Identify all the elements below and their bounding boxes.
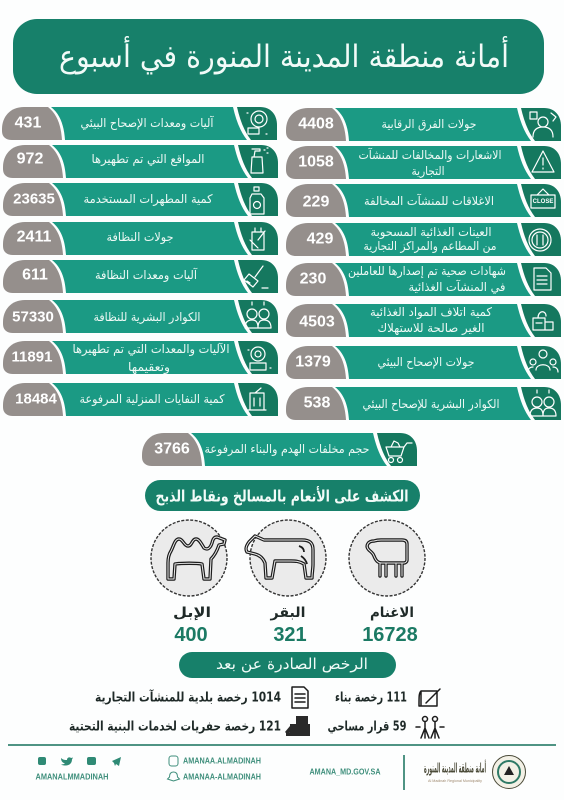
stat: household waste 18484: 18484 <box>15 390 58 408</box>
licence: survey decision <box>328 716 444 738</box>
stat: demolition waste 3766: 3766 <box>154 440 190 458</box>
stat: environmental rounds 1379 <box>286 346 561 379</box>
stat: household waste 18484: كمية النفايات المنزلية المرفوعة <box>80 392 225 407</box>
stat: closures 229: 229 <box>303 194 329 210</box>
icon: sheep <box>349 520 425 596</box>
stat: inspection rounds 4408: 4408 <box>298 116 334 132</box>
footer: logo wordmark: Al Madinah Regional Municipality <box>428 779 482 783</box>
stat: destroyed food 4503: الغير صالحة للاستهلاك <box>378 321 484 336</box>
stat: cleaning rounds 2411 <box>3 222 278 255</box>
stat: cleaning rounds 2411: جولات النظافة <box>106 230 174 245</box>
stat: disinfectant quantity 23635 <box>3 183 278 216</box>
footer: emblem <box>492 756 526 788</box>
title banner: أمانة منطقة المدينة المنورة في أسبوع <box>59 36 509 75</box>
livestock: cattle: البقر <box>269 605 306 621</box>
stat: cleaning equipment 611: آليات ومعدات النظافة <box>95 267 198 283</box>
stat: inspection rounds 4408 <box>286 108 561 141</box>
icon: camel <box>151 520 227 596</box>
livestock: camels: 400 <box>174 624 208 646</box>
stat: notices and violations 1058: 1058 <box>298 154 334 170</box>
stat: environmental staff 538: الكوادر البشرية للإصحاح البيئي <box>362 397 500 412</box>
footer: social media icons <box>38 757 121 766</box>
stat: cleaning equipment 611: 611 <box>22 266 48 284</box>
icon: cow <box>246 520 326 596</box>
stat: demolition waste 3766 <box>142 433 417 466</box>
stat: inspection rounds 4408: جولات الفرق الرقابية <box>382 117 476 132</box>
licence: municipal <box>95 687 308 708</box>
livestock: camels <box>151 520 227 646</box>
licence: building: 111 رخصة بناء <box>335 690 407 706</box>
stat: cleaning equipment 611 <box>3 260 278 293</box>
stat: closures 229 <box>286 184 561 217</box>
icon: excavator <box>285 716 310 736</box>
heading: livestock inspection <box>145 480 420 511</box>
licence: municipal: 1014 رخصة بلدية للمنشآت التجارية <box>95 688 281 706</box>
icon: surveyors <box>416 716 444 738</box>
footer: instagram and snapchat: AMANAA-ALMADINAH <box>183 772 261 782</box>
licence: excavation: 121 رخصة حفريات لخدمات البنية التحتية <box>69 720 281 734</box>
stat: destroyed food 4503: كمية اتلاف المواد الغذائية <box>370 305 492 320</box>
stat: cleaning rounds 2411: 2411 <box>17 228 51 246</box>
stat: cleaning staff 57330: 57330 <box>12 308 54 326</box>
stat: sanitized sites 972: 972 <box>17 150 43 168</box>
stat: environmental equipment 431: 431 <box>15 114 41 132</box>
stat: health certificates 230: شهادات صحية تم إصدارها للعاملين <box>348 264 506 279</box>
stat: destroyed food 4503: 4503 <box>299 314 335 330</box>
livestock: sheep <box>349 520 425 646</box>
stat: food samples 429 <box>286 223 561 256</box>
stat: food samples 429: العينات الغذائية المسحوبة <box>370 225 492 240</box>
stat: health certificates 230 <box>286 263 561 296</box>
footer: instagram and snapchat: AMANAA.ALMADINAH <box>183 756 261 766</box>
footer divider <box>8 744 556 746</box>
footer: handle: AMANALMMADINAH <box>36 772 109 782</box>
stat: health certificates 230: 230 <box>300 270 326 288</box>
stat: environmental equipment 431 <box>2 107 277 140</box>
stat: environmental rounds 1379: 1379 <box>295 354 331 370</box>
stat: notices and violations 1058: التجارية <box>412 164 444 179</box>
heading: remote licences: الرخص الصادرة عن بعد <box>216 655 368 673</box>
licence: survey decision: 59 قرار مساحي <box>328 720 406 734</box>
stat: closures 229: CLOSE <box>533 199 553 205</box>
footer: instagram and snapchat <box>168 756 261 782</box>
heading: remote licences <box>179 652 396 678</box>
stat: disinfectant quantity 23635: كمية المطهرات المستخدمة <box>84 192 213 207</box>
stat: environmental rounds 1379: جولات الإصحاح البيئي <box>378 355 474 370</box>
stat: sanitized sites 972: المواقع التي تم تطهيرها <box>92 152 204 167</box>
stat: sanitized vehicles 11891: الآليات والمعدات التي تم تطهيرها <box>72 342 230 357</box>
livestock: camels: الإبل <box>173 605 211 621</box>
stat: food samples 429: 429 <box>307 230 333 248</box>
stat: cleaning staff 57330 <box>3 300 278 333</box>
stat: food samples 429: من المطاعم والمراكز التجارية <box>364 239 496 254</box>
icon: plan and pencil <box>419 689 440 706</box>
stat: closures 229: الاغلاقات للمنشآت المخالفة <box>364 193 494 208</box>
icon: document <box>292 687 308 708</box>
stat: destroyed food 4503 <box>286 304 561 337</box>
livestock: cattle <box>246 520 326 646</box>
livestock: sheep: 16728 <box>362 624 418 646</box>
stat: notices and violations 1058 <box>286 146 561 179</box>
stat: notices and violations 1058: الاشعارات والمخالفات للمنشآت <box>358 147 502 163</box>
stat: health certificates 230: في المنشآت الغذائية <box>408 279 506 294</box>
livestock: sheep: الاغنام <box>370 605 414 621</box>
livestock: cattle: 321 <box>273 624 307 646</box>
stat: environmental staff 538 <box>286 387 561 420</box>
footer: logo wordmark <box>424 760 486 783</box>
stat: household waste 18484 <box>3 383 278 416</box>
footer: vertical rule <box>403 755 405 790</box>
stat: sanitized vehicles 11891 <box>3 341 278 375</box>
stat: sanitized sites 972 <box>3 145 278 178</box>
heading: livestock inspection: الكشف على الأنعام بالمسالخ ونقاط الذبح <box>156 486 408 506</box>
stat: environmental equipment 431: آليات ومعدات الإصحاح البيئي <box>80 115 214 131</box>
stat: cleaning staff 57330: الكوادر البشرية للنظافة <box>94 310 200 325</box>
stat: disinfectant quantity 23635: 23635 <box>13 190 55 208</box>
footer: website: AMANA_MD.GOV.SA <box>310 768 381 776</box>
stat: demolition waste 3766: حجم مخلفات الهدم والبناء المرفوعة <box>204 442 370 457</box>
stat: sanitized vehicles 11891: 11891 <box>12 348 52 366</box>
title banner <box>13 19 544 94</box>
licence: building <box>335 689 440 706</box>
stat: sanitized vehicles 11891: وتعقيمها <box>128 360 170 375</box>
stat: environmental staff 538: 538 <box>304 394 330 412</box>
